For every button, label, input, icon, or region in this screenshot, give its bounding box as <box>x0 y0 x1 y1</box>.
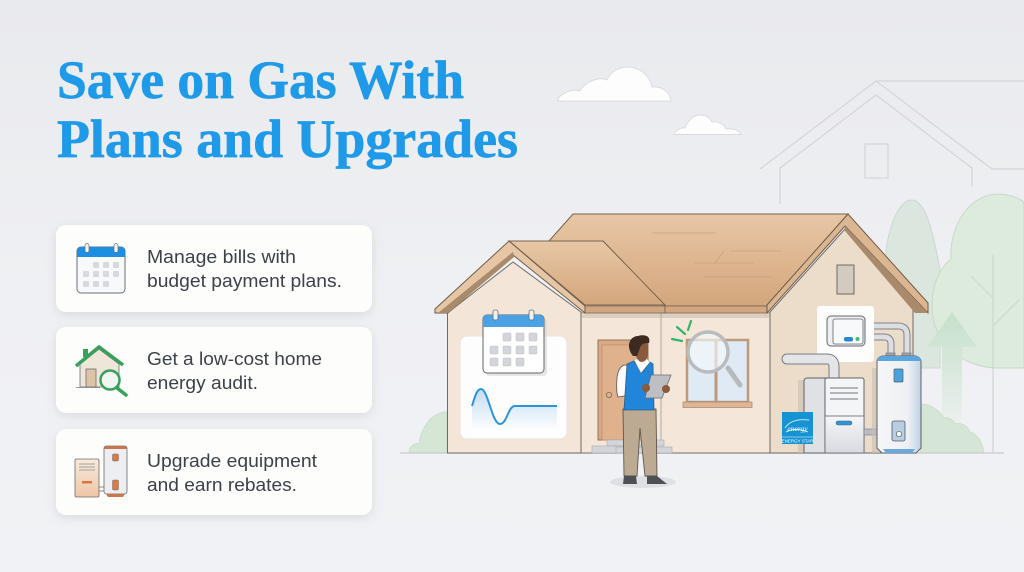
card 1 text: Manage bills with <box>147 247 296 267</box>
person inspector <box>610 335 676 488</box>
ground shadow <box>610 476 676 488</box>
icon: calendar <box>77 244 125 293</box>
clouds <box>558 67 741 134</box>
left hand <box>642 384 650 392</box>
calendar <box>483 310 547 376</box>
upward arrow <box>927 312 977 432</box>
clipboard <box>645 375 671 398</box>
trousers <box>623 409 657 476</box>
hair <box>629 335 649 356</box>
title: Plans and Upgrades <box>57 109 518 169</box>
window <box>683 340 752 408</box>
water heater <box>872 353 921 453</box>
entry divider <box>660 313 662 440</box>
title: Save on Gas With <box>57 50 464 110</box>
gable vent <box>837 265 854 294</box>
right gable roof <box>767 214 928 313</box>
furnace vent pipe <box>787 359 834 382</box>
card 1 text: budget payment plans. <box>147 271 342 291</box>
head <box>636 343 648 362</box>
shoes <box>623 476 637 484</box>
left gable wall <box>448 262 581 453</box>
main roof <box>549 214 848 306</box>
calendar chart panel <box>460 310 567 439</box>
card 3 text: and earn rebates. <box>147 475 297 495</box>
card 3 <box>56 429 372 515</box>
steps <box>592 440 672 453</box>
title <box>57 50 518 169</box>
energy star badge: ENERGY STAR <box>782 438 814 444</box>
shrubs <box>409 404 984 453</box>
icon: furnace and water heater <box>75 446 127 497</box>
card 3 text: Upgrade equipment <box>147 451 317 471</box>
water heater pipes <box>874 326 907 356</box>
shirt sleeve <box>617 365 643 397</box>
card 2 text: energy audit. <box>147 373 258 393</box>
card 1 <box>56 225 372 312</box>
card 1 text <box>147 247 342 291</box>
furnace <box>798 378 864 453</box>
roof shadow <box>582 313 769 318</box>
card 3 text <box>147 451 317 495</box>
right gable wall <box>770 229 913 453</box>
icon: house with magnifier <box>76 347 126 395</box>
middle wall <box>581 313 770 453</box>
card 2 text <box>147 349 322 393</box>
house <box>435 214 928 453</box>
collar <box>634 358 650 373</box>
background trees <box>886 194 1024 453</box>
thermostat panel <box>817 306 874 362</box>
left gable front roof <box>435 241 767 313</box>
connector pipe <box>864 429 879 435</box>
magnifying glass <box>672 321 740 385</box>
vest <box>624 361 654 410</box>
right hand <box>662 385 670 393</box>
wave chart <box>472 389 557 432</box>
card 2 text: Get a low-cost home <box>147 349 322 369</box>
energy star badge: energy <box>787 424 808 433</box>
door <box>598 340 648 440</box>
background house outline <box>760 81 1024 204</box>
energy star badge <box>782 412 814 444</box>
ground line <box>400 452 1004 454</box>
card 2 <box>56 327 372 413</box>
